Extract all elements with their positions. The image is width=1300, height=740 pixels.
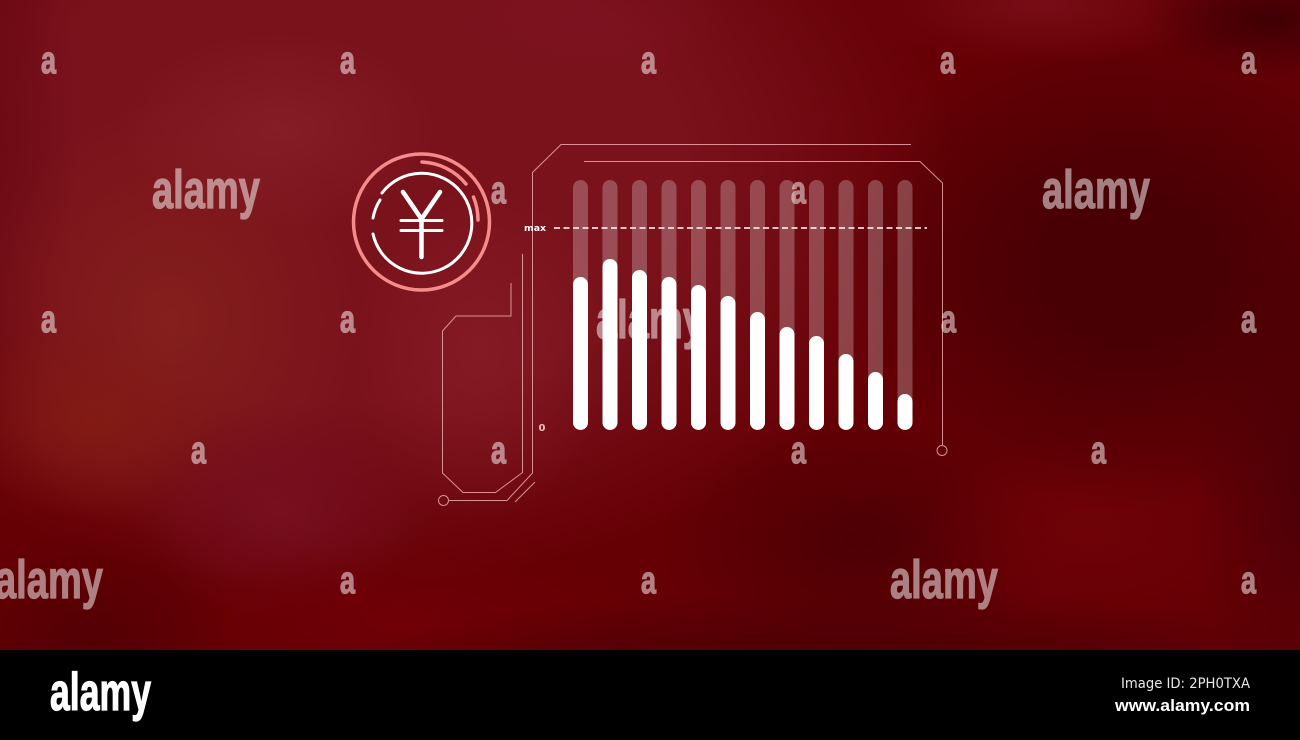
max dashed line bbox=[554, 227, 927, 229]
small watermark letters: a bbox=[41, 40, 57, 82]
footer band bbox=[0, 650, 1300, 740]
small watermark letters: a bbox=[340, 40, 356, 82]
footer image id: Image ID: 2PH0TXA bbox=[1121, 676, 1250, 692]
small watermark letters: a bbox=[941, 299, 957, 341]
small watermark letters: a bbox=[1241, 40, 1257, 82]
small watermark letters: a bbox=[940, 40, 956, 82]
yen symbol bbox=[401, 192, 442, 257]
small watermark letters: a bbox=[791, 430, 807, 472]
small watermark letters: a bbox=[491, 430, 507, 472]
small watermark letters: a bbox=[1091, 430, 1107, 472]
small watermark letters: a bbox=[1241, 560, 1257, 602]
small watermark letters: a bbox=[491, 170, 507, 212]
max label: max bbox=[524, 224, 546, 234]
large watermark words: alamy bbox=[1042, 160, 1150, 220]
right terminal node bbox=[937, 446, 947, 456]
footer website: www.alamy.com bbox=[1114, 696, 1250, 715]
small watermark letters: a bbox=[41, 299, 57, 341]
outer chart frame lines bbox=[438, 144, 947, 506]
large watermark words: alamy bbox=[152, 160, 260, 220]
small watermark letters bbox=[41, 40, 1257, 602]
footer logo: alamy bbox=[50, 663, 151, 722]
watermarks bbox=[0, 40, 1257, 610]
small watermark letters: a bbox=[1241, 299, 1257, 341]
small watermark letters: a bbox=[641, 40, 657, 82]
bar tracks bbox=[573, 180, 912, 430]
small watermark letters: a bbox=[191, 430, 207, 472]
large watermark words: alamy bbox=[596, 290, 704, 350]
small watermark letters: a bbox=[340, 560, 356, 602]
bar chart bbox=[524, 180, 927, 434]
large watermark words: alamy bbox=[890, 550, 998, 610]
small watermark letters: a bbox=[340, 299, 356, 341]
bar values bbox=[573, 259, 912, 430]
icon: yen coin bbox=[354, 154, 490, 290]
small watermark letters: a bbox=[641, 560, 657, 602]
zero label: 0 bbox=[538, 423, 546, 434]
small watermark letters: a bbox=[791, 170, 807, 212]
left terminal node bbox=[438, 496, 448, 506]
large watermark words bbox=[0, 160, 1150, 610]
